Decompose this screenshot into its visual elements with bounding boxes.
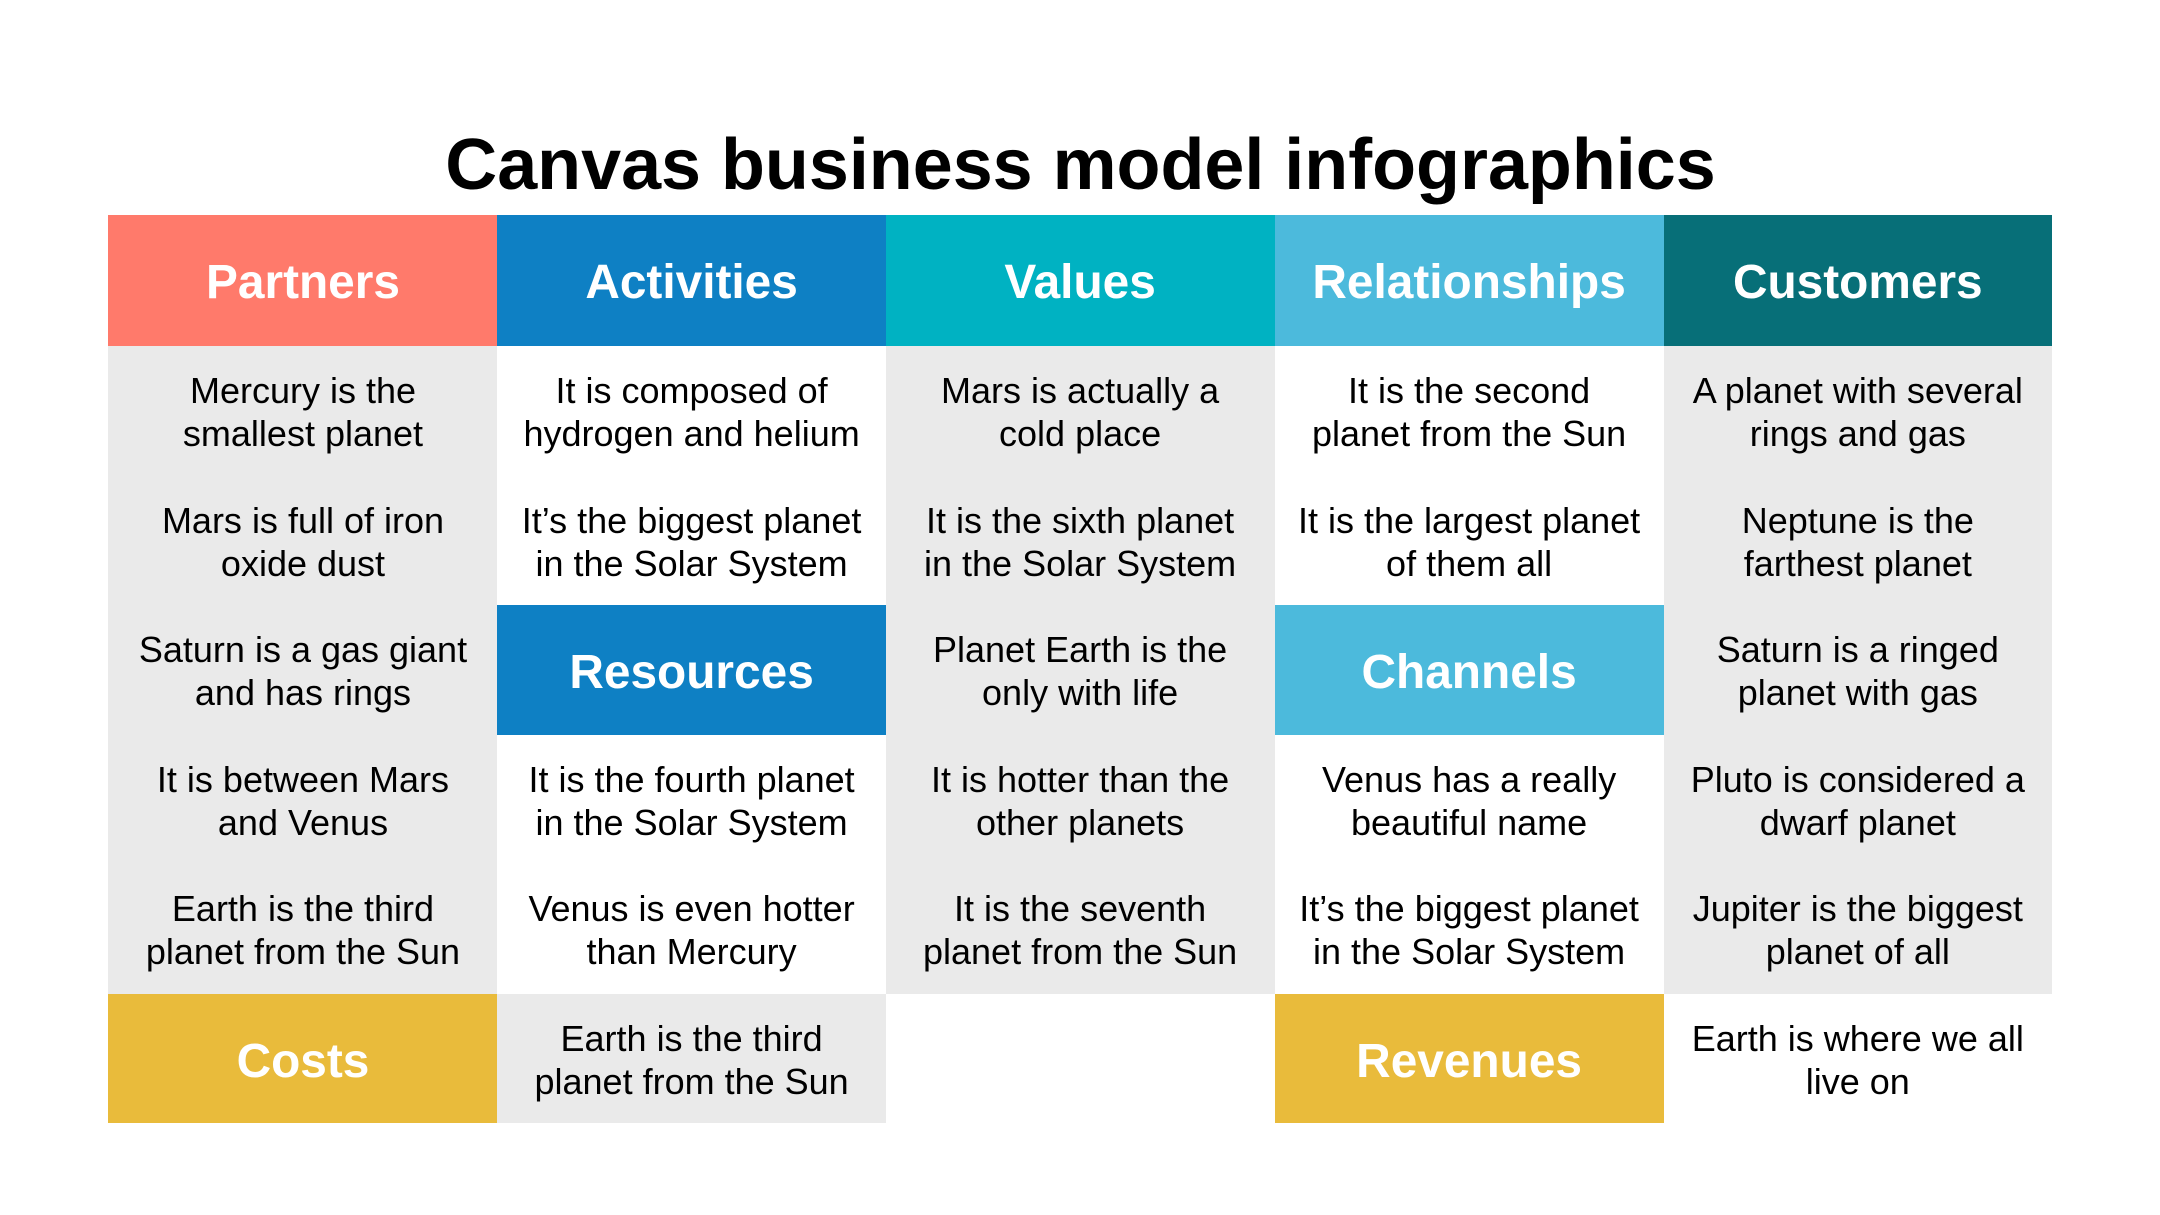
text: customer 4 [1691,759,2025,843]
text: costs description [497,994,886,1123]
text: customer 1: A planet with several [1693,370,2023,411]
text: channel 2: in the Solar System [1313,931,1625,972]
text: revenues description [1692,1018,2024,1102]
text: customer 1: rings and gas [1750,413,1966,454]
text: customer 5: Jupiter is the biggest [1693,888,2023,929]
heading: Costs [108,994,497,1123]
heading: Partners [108,215,497,346]
text: partner 3: and has rings [195,672,411,713]
text: customer 2: farthest planet [1744,543,1972,584]
heading: Activities: Activities [585,256,798,309]
text: Values list background with items [886,346,1275,994]
heading: Revenues [1275,994,1664,1123]
text: channel 2: It’s the biggest planet [1299,888,1639,929]
text: partner 4: It is between Mars [157,759,449,800]
heading: Relationships [1275,215,1664,346]
text: partner 2: oxide dust [221,543,385,584]
text: partner 5 [146,888,460,972]
panel: Customers column [1664,215,2052,1102]
panel: Values column [886,215,1275,994]
panel: Relationships and Channels column [1275,215,1664,1123]
text: resource 1: It is the fourth planet [528,759,855,800]
text: costs description: Earth is the third [561,1018,823,1059]
text: Partners list background with items [108,346,497,994]
text: partner 1 [183,370,423,454]
text: costs description: planet from the Sun [534,1061,849,1102]
text: revenues description: live on [1806,1061,1910,1102]
panel: Activities and Resources column [497,215,886,1123]
text: activity 2: It’s the biggest planet [522,500,861,541]
text: partner 3: Saturn is a gas giant [139,629,467,670]
text: customer 3: Saturn is a ringed [1717,629,1999,670]
text: value 4: other planets [976,802,1184,843]
text: customer 2: Neptune is the [1742,500,1974,541]
text: resource 2: Venus is even hotter [528,888,855,929]
heading: Values [886,215,1275,346]
text: partner 5: Earth is the third [172,888,434,929]
text: relationship 1 [1312,370,1626,454]
text: relationship 2: of them all [1386,543,1552,584]
text: relationship 2 [1298,500,1640,584]
text: partner 2: Mars is full of iron [162,500,444,541]
heading: Costs: Costs [237,1035,369,1088]
panel: Partners column [108,215,497,1123]
heading: Resources [497,605,886,735]
text: activity 2: in the Solar System [536,543,848,584]
text: channel 1: beautiful name [1351,802,1587,843]
text: relationship 1: It is the second [1348,370,1590,411]
text: value 5 [923,888,1237,972]
heading: Customers [1664,215,2052,346]
text: customer 1 [1692,370,2023,454]
text: value 5: planet from the Sun [923,931,1237,972]
text: partner 2 [162,500,444,584]
text: customer 4: dwarf planet [1760,802,1956,843]
text: customer 4: Pluto is considered a [1691,759,2025,800]
text: activity 2 [522,500,862,584]
text: value 3: Planet Earth is the [933,629,1227,670]
text: channel 2 [1299,888,1639,972]
text: customer 5: planet of all [1766,931,1950,972]
text: customer 5 [1693,888,2023,972]
text: customer 3 [1717,629,1999,713]
text: value 2: in the Solar System [924,543,1236,584]
text: relationship 1: planet from the Sun [1312,413,1626,454]
heading: Resources: Resources [569,646,814,699]
text: resource 2: than Mercury [587,931,797,972]
heading: Customers: Customers [1733,256,1983,309]
text: value 1 [941,370,1220,454]
heading: Channels: Channels [1362,646,1577,699]
text: resource 2 [528,888,855,972]
text: value 3 [933,629,1227,713]
title: Canvas business model infographics [445,125,1716,205]
text: customer 2 [1742,500,1974,584]
text: customer 3: planet with gas [1738,672,1978,713]
heading: Relationships: Relationships [1312,256,1626,309]
text: value 4 [931,759,1229,843]
text: partner 4 [157,759,449,843]
heading: Activities [497,215,886,346]
heading: Channels [1275,605,1664,735]
text: value 1: cold place [999,413,1161,454]
text: value 4: It is hotter than the [931,759,1229,800]
text: value 1: Mars is actually a [941,370,1219,411]
text: resource 1 [528,759,855,843]
text: value 3: only with life [982,672,1178,713]
text: partner 5: planet from the Sun [146,931,460,972]
text: resource 1: in the Solar System [536,802,848,843]
text: partner 4: and Venus [218,802,388,843]
text: partner 1: Mercury is the [190,370,416,411]
text: relationship 2: It is the largest planet [1298,500,1640,541]
text: value 2: It is the sixth planet [926,500,1234,541]
heading: Values: Values [1004,256,1156,309]
text: channel 1: Venus has a really [1322,759,1616,800]
text: revenues description: Earth is where we all [1692,1018,2024,1059]
text: partner 1: smallest planet [183,413,423,454]
text: activity 1: It is composed of [556,370,828,411]
text: activity 1: hydrogen and helium [523,413,860,454]
text: value 2 [924,500,1236,584]
heading: Partners: Partners [206,256,400,309]
text: channel 1 [1322,759,1616,843]
text: partner 3 [139,629,467,713]
text: activity 1 [523,370,860,454]
text: Customers list background with items [1664,346,2052,994]
heading: Revenues: Revenues [1356,1035,1582,1088]
text: value 5: It is the seventh [954,888,1206,929]
